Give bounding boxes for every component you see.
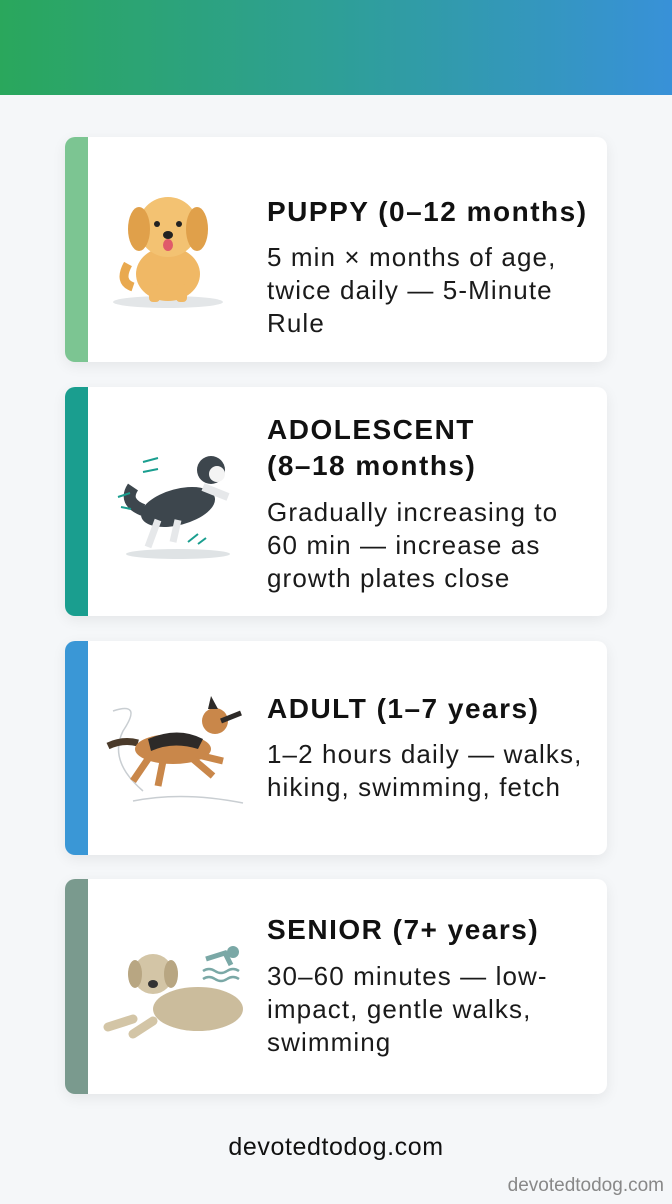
text: senior: 30–60 minutes — low- [267,961,548,991]
panel: puppy [65,137,607,362]
text: puppy [267,242,556,338]
title: senior: SENIOR (7+ years) [267,914,539,945]
icon: puppy [113,197,223,308]
icon: german shepherd [106,696,243,804]
text: adolescent: growth plates close [267,563,510,593]
watermark: devotedtodog.com [508,1175,664,1196]
text: senior [267,961,548,1057]
icon: border collie [118,456,230,559]
text: adult [267,739,582,802]
title: adolescent: (8–18 months) [267,450,476,481]
panel: senior [65,879,607,1094]
text: adolescent: Gradually increasing to [267,497,558,527]
text: puppy: twice daily — 5-Minute [267,275,553,305]
panel: adolescent [65,387,607,616]
title: adult: ADULT (1–7 years) [267,693,539,724]
text: adult: 1–2 hours daily — walks, [267,739,582,769]
text: senior: impact, gentle walks, [267,994,531,1024]
header band [0,0,672,95]
text: adolescent [267,497,558,593]
text: adult: hiking, swimming, fetch [267,772,561,802]
text: puppy: 5 min × months of age, [267,242,556,272]
text: puppy: Rule [267,308,325,338]
panel: adult [65,641,607,855]
title: adolescent [267,414,476,481]
text: senior: swimming [267,1027,391,1057]
icon: senior lab with swimmer [104,946,243,1038]
title: puppy: PUPPY (0–12 months) [267,196,588,227]
footer: devotedtodog.com [228,1133,444,1161]
text: adolescent: 60 min — increase as [267,530,540,560]
title: adolescent: ADOLESCENT [267,414,475,445]
